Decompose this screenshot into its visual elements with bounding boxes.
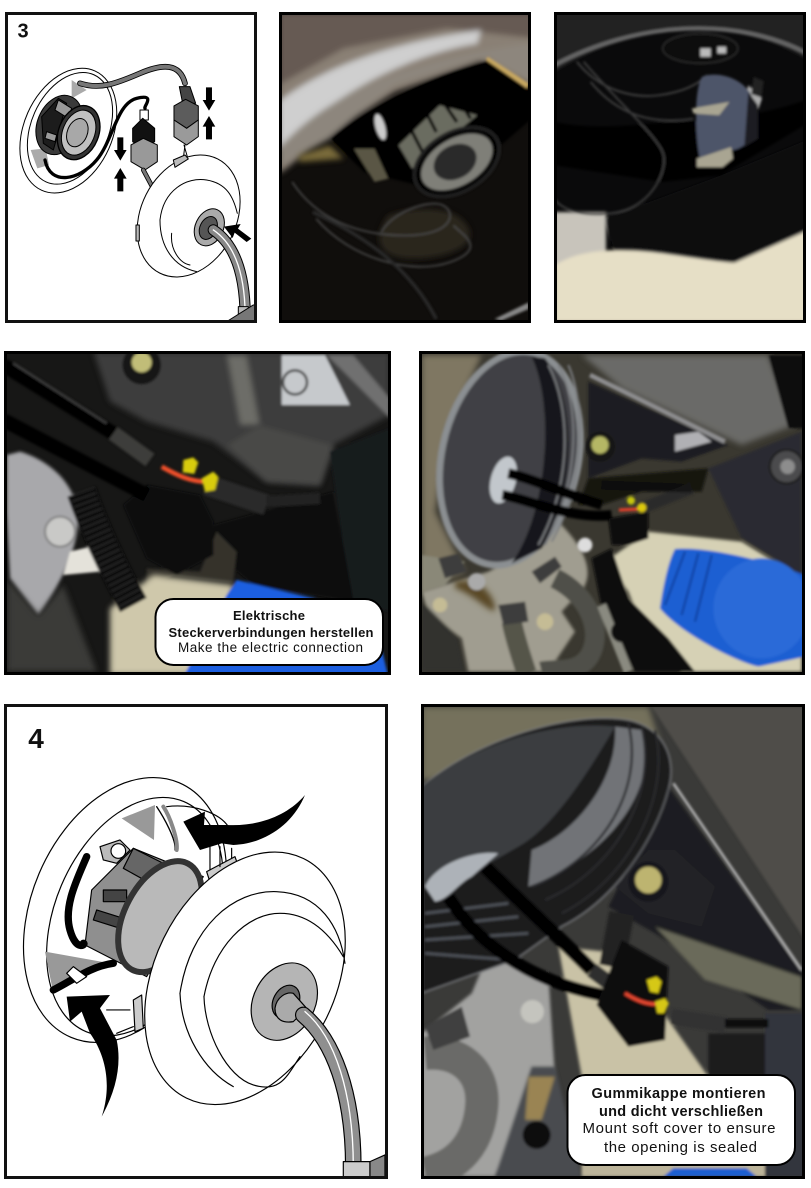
icon: push arrows on left connector: [114, 137, 127, 191]
callout: make the electric connection: Make the electric connection: [178, 640, 363, 655]
photo: bolt and bracket: [615, 850, 715, 927]
panel: step 4 illustration: [0, 704, 388, 1182]
illustration: grommet: [238, 951, 330, 1052]
panel: photo of fan inside lamp housing: [278, 12, 536, 323]
photo: rim and dark housing: [555, 12, 810, 269]
photo: red wire and yellow clips: [619, 497, 646, 512]
illustration: back ring: [22, 777, 228, 1043]
photo: silver bracket and bolt: [7, 452, 100, 672]
photo: rubber cap ellipse: [434, 354, 588, 570]
photo: red wire and yellow clips: [162, 457, 218, 492]
panel: photo with electric connection close-up: [3, 346, 391, 677]
photo: cream tank and dark gap: [605, 532, 802, 672]
illustration: cap with grommet: [136, 154, 241, 278]
photo: engine bay background: [93, 346, 390, 675]
photo: gray housing upper right: [578, 355, 805, 575]
illustration: left plug connector: [131, 110, 157, 190]
panel: photo of connector inside lamp housing: [554, 12, 810, 323]
photo: silver bracket and hoses: [422, 953, 582, 1177]
callout: make the electric connection: Steckerverbindungen herstellen: [168, 625, 374, 640]
icon: upper curved arrow: [183, 795, 305, 850]
photo: black cables and rear assembly: [502, 473, 692, 545]
photo: blue washer fluid cap: [660, 549, 810, 667]
illustration: fan body and cable: [53, 840, 219, 990]
photo: silver headlamp rim: [278, 12, 536, 172]
photo: backgrounds: [422, 707, 805, 1177]
panel: photo with rubber cap and blue reservoir: [417, 334, 810, 675]
illustration: cable pair leading down: [213, 230, 260, 322]
illustration: front cap: [105, 819, 385, 1138]
callout: mount soft cover: Gummikappe montieren: [592, 1086, 766, 1102]
photo: blue reservoir cap: [183, 580, 388, 677]
photo: thin black wires: [292, 182, 470, 319]
panel: photo with cap mounted: [421, 704, 805, 1179]
photo: corrugated tube: [82, 492, 133, 605]
step number 4: 4: [28, 723, 44, 754]
photo: blue cap peeking at bottom: [663, 1168, 757, 1177]
icon: lower curved arrow: [67, 995, 119, 1117]
callout: mount soft cover: und dicht verschließen: [599, 1104, 763, 1120]
step number 3: 3: [17, 20, 29, 42]
icon: push arrows on right connector: [203, 87, 215, 139]
photo: silver bracket and hoses: [422, 522, 632, 673]
photo: black cables: [3, 363, 320, 505]
illustration: right plug connector: [174, 87, 198, 158]
photo: black rubber cap: [123, 485, 213, 575]
photo: tan surround: [422, 355, 482, 592]
callout: make the electric connection: [156, 599, 383, 665]
panel: step 3 illustration: [1, 12, 260, 323]
photo: corrugated tube: [612, 913, 622, 967]
photo: cream washer fluid tank: [555, 229, 810, 322]
photo: red wire and yellow clips: [625, 977, 669, 1013]
illustration: cap clips: [107, 847, 237, 1033]
photo: black cables: [448, 867, 768, 1025]
icon: arrow to grommet: [224, 224, 251, 242]
callout: make the electric connection: Elektrische: [233, 608, 305, 623]
illustration: gray cable to right connector: [80, 67, 185, 86]
photo: rear connector: [597, 940, 668, 1047]
illustration: cable pair: [303, 1012, 385, 1182]
callout: mount soft cover: the opening is sealed: [604, 1139, 757, 1156]
callout: mount soft cover: [568, 1075, 795, 1165]
illustration: back ring with fan: [19, 68, 150, 194]
photo: impeller fan: [299, 57, 536, 259]
photo: blue-gray connector with blades: [692, 75, 764, 167]
photo: thin wires: [555, 62, 707, 214]
callout: mount soft cover: Mount soft cover to ensure: [582, 1120, 776, 1137]
photo: large rubber cap: [422, 718, 671, 993]
